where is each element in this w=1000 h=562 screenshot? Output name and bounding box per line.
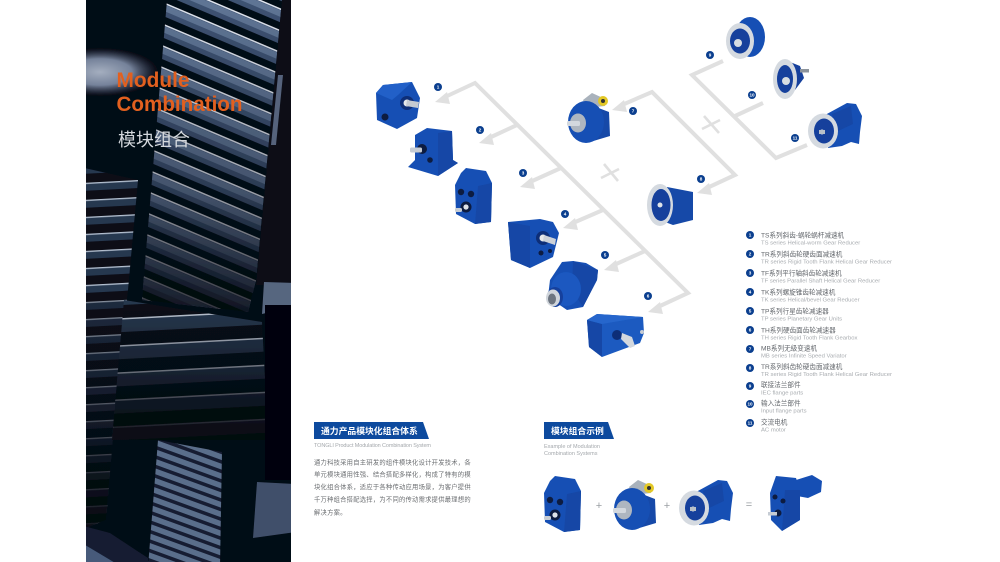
product 5: TP planetary	[546, 261, 598, 310]
legend: product list: 8	[749, 366, 752, 371]
legend: product list: TS系列斜齿-蜗轮蜗杆减速机	[761, 230, 845, 240]
text block: system description: 单元模块通用性强、结合搭配多样化，构成了特有的模	[314, 470, 471, 478]
number badges on diagram: 7	[632, 109, 635, 114]
title: Module Combination: Combination	[116, 93, 242, 116]
text block: system description: 千万种组合搭配选择，为不同的传动需求提供最理想的	[314, 494, 471, 504]
legend: product list: 7	[749, 347, 752, 352]
legend: product list: MB series Infinite Speed Variator	[761, 354, 847, 360]
example: gear reducer	[544, 476, 581, 532]
legend: product list: TK series Helical/bevel Gear Reducer	[761, 298, 860, 304]
product 10: input flange	[773, 59, 809, 99]
legend: product list: TP series Planetary Gear Units	[761, 316, 842, 322]
arrow group: gear units 1-6	[435, 83, 688, 314]
example: motor	[679, 480, 733, 526]
subheading: example english: Example of Modulation	[544, 444, 600, 450]
number badges on diagram: 9	[709, 53, 712, 58]
subheading: modular system english: TONGLI Product Modulation Combination System	[314, 443, 431, 449]
number badges on diagram: 1	[437, 85, 440, 90]
legend: product list: TH series Rigid Tooth Flank Gearbox	[761, 336, 858, 342]
heading: example: 模块组合示例	[551, 425, 604, 436]
product 7: MB variator	[567, 93, 610, 143]
text block: system description: 块化组合体系，适应于各种传动应用场景，为客户提供	[314, 482, 471, 491]
legend: product list: 联接法兰部件	[761, 380, 801, 389]
title: Module Combination	[116, 69, 242, 150]
example: assembled gearmotor	[768, 475, 822, 531]
legend: product list: 输入法兰部件	[761, 398, 801, 408]
text block: system description	[314, 458, 471, 516]
title: Module Combination: Module	[116, 69, 190, 92]
icon: equals sign: =	[746, 499, 752, 511]
product 4: TK reducer	[508, 219, 559, 268]
panel: gear photograph	[86, 0, 291, 562]
legend: product list: TR系列斜齿轮硬齿面减速机	[761, 250, 843, 258]
legend: product list: 2	[749, 252, 752, 257]
number badges on diagram: 3	[522, 171, 525, 176]
number badges on diagram: 11	[793, 136, 798, 141]
legend: product list: AC motor	[761, 428, 786, 434]
heading: example	[544, 422, 614, 439]
legend: product list	[746, 230, 892, 434]
heading: modular system	[314, 422, 429, 439]
legend: product list: TR系列斜齿轮硬齿面减速机	[761, 362, 843, 371]
legend: product list: 3	[749, 271, 752, 276]
heading: modular system: 通力产品模块化组合体系	[321, 425, 418, 436]
product 8: TR reducer with flange	[647, 184, 693, 226]
product 1: TS reducer	[376, 82, 420, 129]
legend: product list: 交流电机	[761, 418, 788, 426]
bracket group: flange and motor 9-11	[692, 61, 807, 158]
legend: product list: TH系列硬齿面齿轮减速器	[761, 326, 836, 334]
example: variator	[613, 480, 656, 530]
legend: product list: TR series Rigid Tooth Flank Helical Gear Reducer	[761, 372, 892, 378]
product 2: TR reducer	[408, 128, 458, 176]
legend: product list: MB系列无级变速机	[761, 344, 817, 352]
product 9: IEC flange	[726, 17, 765, 59]
number badges on diagram: 6	[647, 294, 650, 299]
number badges on diagram	[434, 51, 799, 300]
legend: product list: 6	[749, 328, 752, 333]
arrow group: variator and reducer 7-8	[612, 92, 735, 195]
number badges on diagram: 8	[700, 177, 703, 182]
legend: product list: Input flange parts	[761, 408, 807, 414]
legend: product list: TF series Parallel Shaft Helical Gear Reducer	[761, 278, 880, 284]
legend: product list: 4	[749, 290, 752, 295]
subheading: example english: Combination Systems	[544, 451, 598, 457]
legend: product list: 11	[748, 421, 753, 426]
icon: plus between groups	[601, 164, 619, 181]
icon: plus between flange group	[702, 116, 720, 133]
number badges on diagram: 4	[564, 212, 567, 217]
legend: product list: TP系列行星齿轮减速器	[761, 306, 829, 316]
text block: system description: 解决方案。	[314, 508, 347, 516]
product 11: AC motor	[808, 103, 862, 148]
text block: system description: 通力科技采用自主研发的组件模块化设计开发技术，各	[314, 458, 471, 466]
subheading: example english	[544, 444, 600, 457]
legend: product list: 9	[749, 384, 752, 389]
number badges on diagram: 5	[604, 253, 607, 258]
legend: product list: TK系列螺旋锥齿轮减速机	[761, 288, 836, 296]
icon: plus sign: +	[664, 500, 670, 512]
legend: product list: TR series Rigid Tooth Flank Helical Gear Reducer	[761, 260, 892, 266]
legend: product list: 5	[749, 309, 752, 314]
product 3: TF reducer	[455, 168, 492, 224]
legend: product list: TS series Helical-worm Gear Reducer	[761, 240, 860, 246]
number badges on diagram: 10	[749, 93, 755, 98]
title: Module Combination: 模块组合	[118, 130, 190, 150]
number badges on diagram: 2	[479, 128, 482, 133]
legend: product list: TF系列平行轴斜齿轮减速机	[761, 268, 842, 278]
icon: plus sign: +	[596, 500, 602, 512]
product 6: TH gearbox	[587, 314, 644, 357]
legend: product list: 1	[749, 233, 752, 238]
legend: product list: 10	[747, 402, 753, 407]
legend: product list: IEC flange parts	[761, 390, 803, 396]
